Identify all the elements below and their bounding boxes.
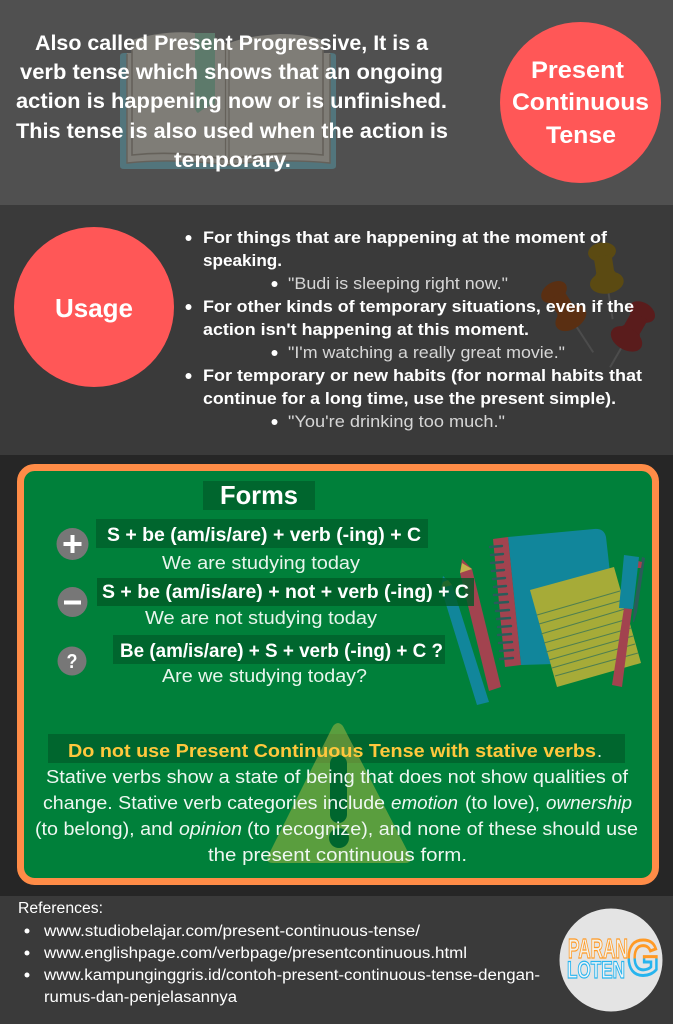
- title badge: Continuous: [512, 89, 649, 116]
- usage badge: [14, 227, 174, 387]
- example: positive: We are studying today: [162, 552, 361, 573]
- example: negative: We are not studying today: [145, 607, 378, 628]
- title badge: Present: [531, 57, 624, 84]
- example: question: Are we studying today?: [162, 665, 367, 686]
- formula: question: Be (am/is/are) + S + verb (-ing) + C ?: [120, 640, 443, 662]
- icon: question: [58, 646, 86, 676]
- stative verbs explanation: the present continuous form.: [208, 844, 467, 865]
- icon: question: ?: [66, 651, 78, 673]
- stative verbs explanation: (to recognize), and none of these should use: [247, 818, 638, 839]
- usage list: speaking.: [203, 251, 282, 270]
- usage list: "Budi is sleeping right now.": [288, 274, 508, 293]
- references text: www.englishpage.com/verbpage/presentcontinuous.html: [43, 945, 467, 962]
- references text: References:: [18, 900, 103, 917]
- stative verbs explanation: change. Stative verb categories include: [43, 792, 385, 813]
- stative verbs explanation: Stative verbs show a state of being that does not show qualities of: [46, 766, 629, 787]
- heading: forms: Forms: [220, 480, 298, 510]
- usage list: continue for a long time, use the present simple).: [203, 389, 616, 408]
- definition text: This tense is also used when the action is: [16, 119, 448, 143]
- definition text: [16, 31, 448, 172]
- usage badge: Usage: [55, 293, 133, 323]
- formula: positive: S + be (am/is/are) + verb (-ing) + C: [107, 524, 421, 546]
- panel: usage: [0, 205, 673, 455]
- logo: G: [627, 930, 659, 986]
- stative verbs explanation: (to love),: [465, 792, 540, 813]
- title badge: Tense: [546, 122, 616, 149]
- usage list: For other kinds of temporary situations, even if the: [203, 297, 634, 316]
- icon: minus: [58, 587, 88, 617]
- references text: www.kampunginggris.id/contoh-present-continuous-tense-dengan-: [43, 967, 540, 984]
- formula: negative: S + be (am/is/are) + not + verb (-ing) + C: [102, 581, 469, 603]
- warning band background: [48, 734, 625, 763]
- definition text: verb tense which shows that an ongoing: [20, 60, 443, 84]
- icon: warning triangle: [267, 723, 411, 863]
- icon: push pins: [535, 240, 661, 376]
- usage list: "I'm watching a really great movie.": [288, 343, 565, 362]
- title badge: [500, 22, 661, 183]
- logo: [560, 908, 662, 1012]
- logo: LOTEN: [567, 957, 625, 984]
- panel: forms background: [0, 455, 673, 896]
- logo: PARAN: [568, 933, 628, 964]
- usage list: For temporary or new habits (for normal habits that: [203, 366, 642, 385]
- usage list: For things that are happening at the moment of: [203, 228, 607, 247]
- panel: references: [0, 896, 673, 1024]
- icon: open book: [120, 32, 336, 169]
- references text: [18, 900, 540, 1006]
- definition text: action is happening now or is unfinished.: [16, 89, 447, 113]
- usage list: action isn't happening at this moment.: [203, 320, 529, 339]
- stative verbs explanation: opinion: [179, 818, 242, 839]
- panel: forms card: [20, 468, 656, 882]
- stative verbs explanation: ownership: [546, 792, 632, 813]
- references text: rumus-dan-penjelasannya: [44, 989, 237, 1006]
- stative verbs explanation: [35, 766, 638, 865]
- icon: plus: [56, 528, 88, 560]
- definition text: Also called Present Progressive, It is a: [35, 31, 429, 55]
- references text: www.studiobelajar.com/present-continuous-tense/: [43, 923, 421, 940]
- stative verbs explanation: (to belong), and: [35, 818, 173, 839]
- illustration: notebook and pencils: [441, 529, 645, 705]
- stative verbs explanation: emotion: [391, 792, 458, 813]
- usage list: "You're drinking too much.": [288, 412, 505, 431]
- usage list: [186, 228, 642, 431]
- definition text: temporary.: [174, 148, 291, 172]
- panel: definition: [0, 0, 673, 205]
- warning text: .: [597, 740, 602, 761]
- warning text: Do not use Present Continuous Tense with stative verbs: [68, 740, 596, 761]
